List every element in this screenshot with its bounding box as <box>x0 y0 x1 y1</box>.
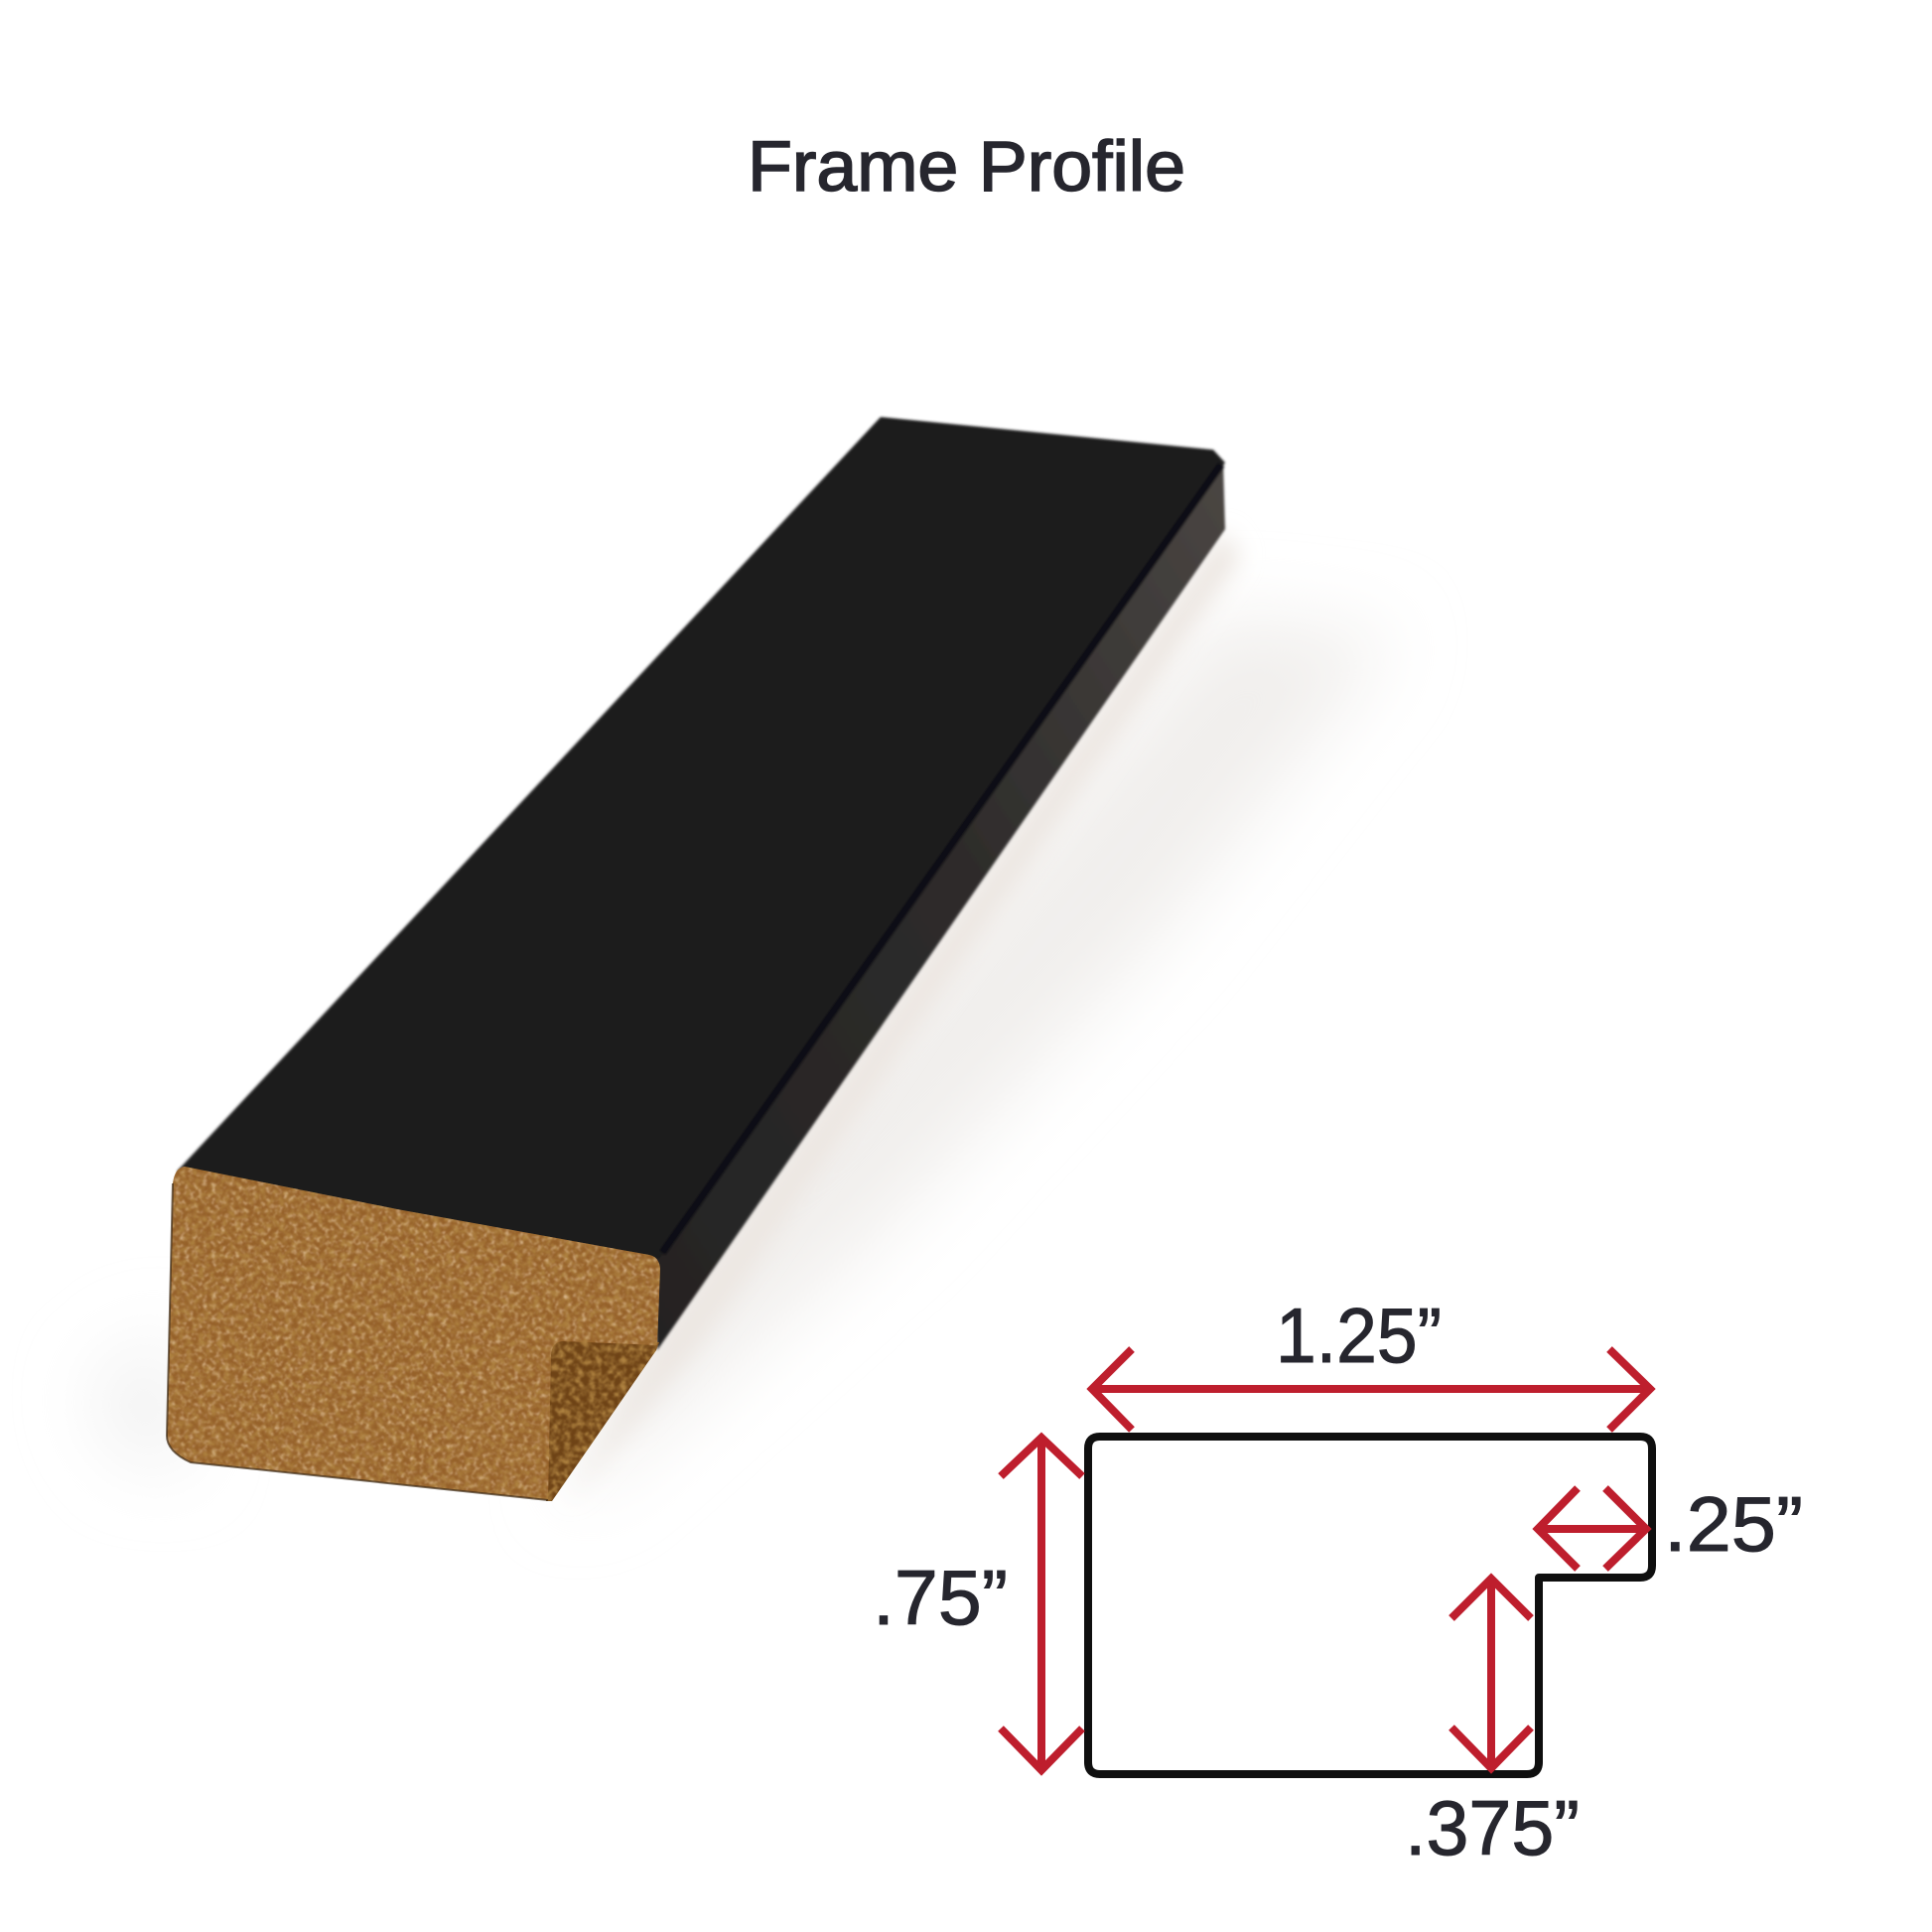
label: .25 inches: .25” <box>1664 1480 1803 1568</box>
title: Frame Profile <box>748 128 1185 207</box>
arrow: height .75 <box>1001 1438 1082 1770</box>
notch inner wood grain <box>546 1335 659 1501</box>
label: .375 inches: .375” <box>1405 1784 1580 1871</box>
label: 1.25 inches: 1.25” <box>1276 1292 1442 1379</box>
side face <box>650 462 1225 1350</box>
wood end grain <box>167 1167 660 1500</box>
frame body <box>177 417 1225 1350</box>
frame photo: black moulding with wood end <box>89 417 1395 1509</box>
top edge highlight <box>662 465 1221 1253</box>
top face <box>177 417 1225 1259</box>
cast shadow <box>89 616 1395 1509</box>
notch inner wood <box>546 1335 659 1501</box>
contact shadow <box>566 531 1241 1504</box>
arrow: width 1.25 <box>1092 1349 1650 1430</box>
profile diagram outline <box>1088 1437 1652 1774</box>
label: .75 inches: .75” <box>873 1554 1008 1641</box>
arrow: lip width .25 <box>1538 1488 1646 1569</box>
arrow: lip depth .375 <box>1451 1579 1531 1768</box>
